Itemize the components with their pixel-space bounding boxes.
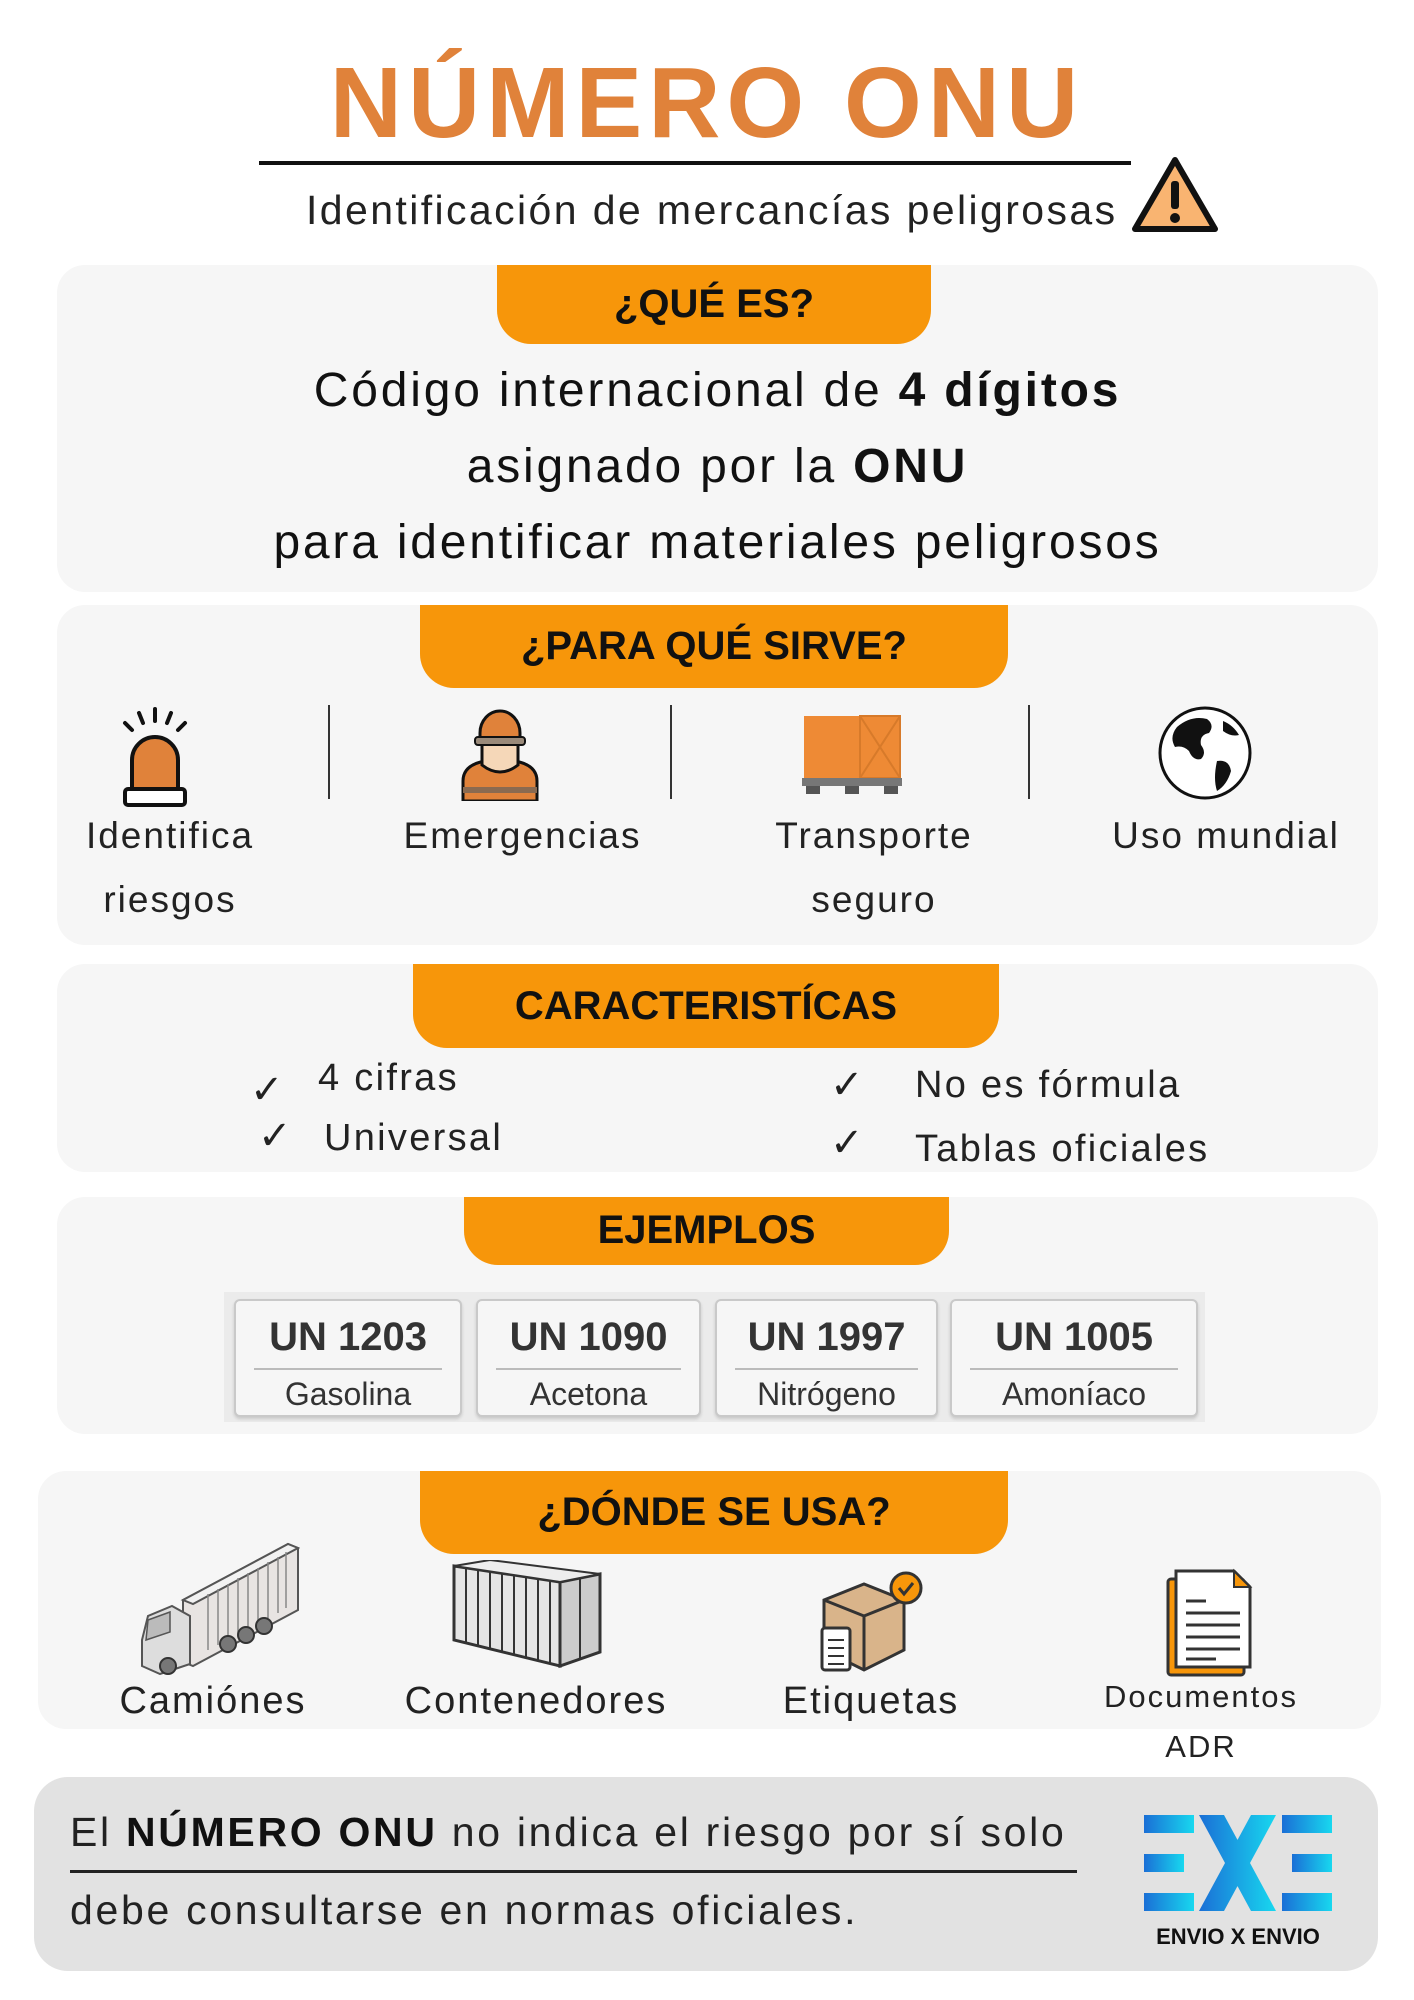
tab: ¿DÓNDE SE USA?: ¿DÓNDE SE USA? [537, 1490, 891, 1534]
text block: definition: para identificar materiales peligrosos [273, 516, 1162, 569]
checklist left: Universal [324, 1117, 503, 1159]
tab: EJEMPLOS: EJEMPLOS [598, 1208, 815, 1252]
panel: ejemplos [57, 1197, 1378, 1434]
panel: dónde se usa [38, 1471, 1381, 1729]
tab: ¿DÓNDE SE USA? [420, 1471, 1008, 1554]
panel: bottom note [34, 1777, 1378, 1971]
checklist left [250, 1057, 503, 1159]
text block: definition: asignado por la ONU [467, 440, 968, 493]
text block: definition [273, 364, 1162, 569]
panel: qué es [57, 265, 1378, 592]
tab: EJEMPLOS [464, 1197, 949, 1265]
card: UN 1203: UN 1203 [269, 1315, 427, 1359]
card: UN 1997: Nitrógeno [757, 1376, 896, 1412]
icon: truck [141, 1542, 300, 1675]
label: identifica riesgos: riesgos [103, 879, 237, 920]
tab: CARACTERISTÍCAS: CARACTERISTÍCAS [515, 984, 897, 1028]
label: identifica riesgos [86, 815, 254, 920]
label: transporte seguro: Transporte [775, 815, 973, 856]
tab: ¿PARA QUÉ SIRVE?: ¿PARA QUÉ SIRVE? [521, 624, 907, 668]
card: UN 1203: Gasolina [285, 1376, 411, 1412]
panel: para qué sirve [57, 605, 1378, 945]
label: identifica riesgos: Identifica [86, 815, 254, 856]
logo: EXE envio x envio: ENVIO X ENVIO [1156, 1924, 1320, 1949]
label: camiones: Camiónes [119, 1680, 307, 1722]
label: documentos ADR [1104, 1679, 1298, 1764]
card: UN 1997 [715, 1299, 938, 1417]
label: documentos ADR: Documentos [1104, 1679, 1298, 1714]
label: documentos ADR: ADR [1165, 1729, 1237, 1764]
tab: ¿QUÉ ES? [497, 265, 931, 344]
label: transporte seguro: seguro [811, 879, 937, 920]
subtitle: Identificación de mercancías peligrosas [306, 187, 1117, 233]
label: uso mundial: Uso mundial [1112, 815, 1340, 856]
label: emergencias: Emergencias [404, 815, 641, 856]
icon: container [452, 1560, 602, 1668]
card: UN 1090 [476, 1299, 701, 1417]
card: UN 1005: Amoníaco [1002, 1376, 1146, 1412]
label: etiquetas: Etiquetas [783, 1680, 959, 1722]
panel: bottom note: debe consultarse en normas oficiales. [70, 1887, 858, 1933]
checklist right: ✓ [830, 1063, 864, 1107]
checklist left: ✓ [258, 1114, 292, 1158]
dividers [328, 705, 330, 799]
tab: CARACTERISTÍCAS [413, 964, 999, 1048]
icon: labeled box [820, 1572, 922, 1672]
card: UN 1997: UN 1997 [748, 1315, 905, 1359]
card: UN 1005: UN 1005 [995, 1315, 1153, 1359]
checklist right: Tablas oficiales [915, 1128, 1210, 1170]
card: UN 1090: Acetona [530, 1376, 647, 1412]
checklist right: No es fórmula [915, 1064, 1181, 1106]
note text: El NÚMERO ONU no indica el riesgo por sí solo [70, 1809, 1066, 1855]
example cards [224, 1292, 1205, 1422]
icon: emergency worker [462, 710, 538, 801]
card: UN 1005 [950, 1299, 1198, 1417]
checklist left: 4 cifras [318, 1057, 459, 1099]
divider line under title [259, 161, 1131, 165]
panel: características [57, 964, 1378, 1172]
checklist right: ✓ [830, 1121, 864, 1165]
icon: warning triangle [1132, 157, 1218, 232]
title: NÚMERO ONU [330, 47, 1084, 159]
icon: globe [1158, 706, 1252, 800]
checklist right [830, 1063, 1210, 1170]
label: transporte seguro [775, 815, 973, 920]
card: UN 1090: UN 1090 [510, 1315, 667, 1359]
logo: EXE envio x envio [1144, 1815, 1332, 1949]
icon: pallet box [802, 715, 902, 794]
card: UN 1203 [234, 1299, 462, 1417]
icon: document [1166, 1568, 1252, 1676]
text block: definition: Código internacional de 4 dígitos [314, 364, 1121, 417]
icon: siren [122, 707, 188, 807]
label: contenedores: Contenedores [405, 1680, 667, 1722]
checklist left: ✓ [250, 1068, 284, 1112]
tab: ¿PARA QUÉ SIRVE? [420, 605, 1008, 688]
tab: ¿QUÉ ES?: ¿QUÉ ES? [614, 282, 814, 326]
